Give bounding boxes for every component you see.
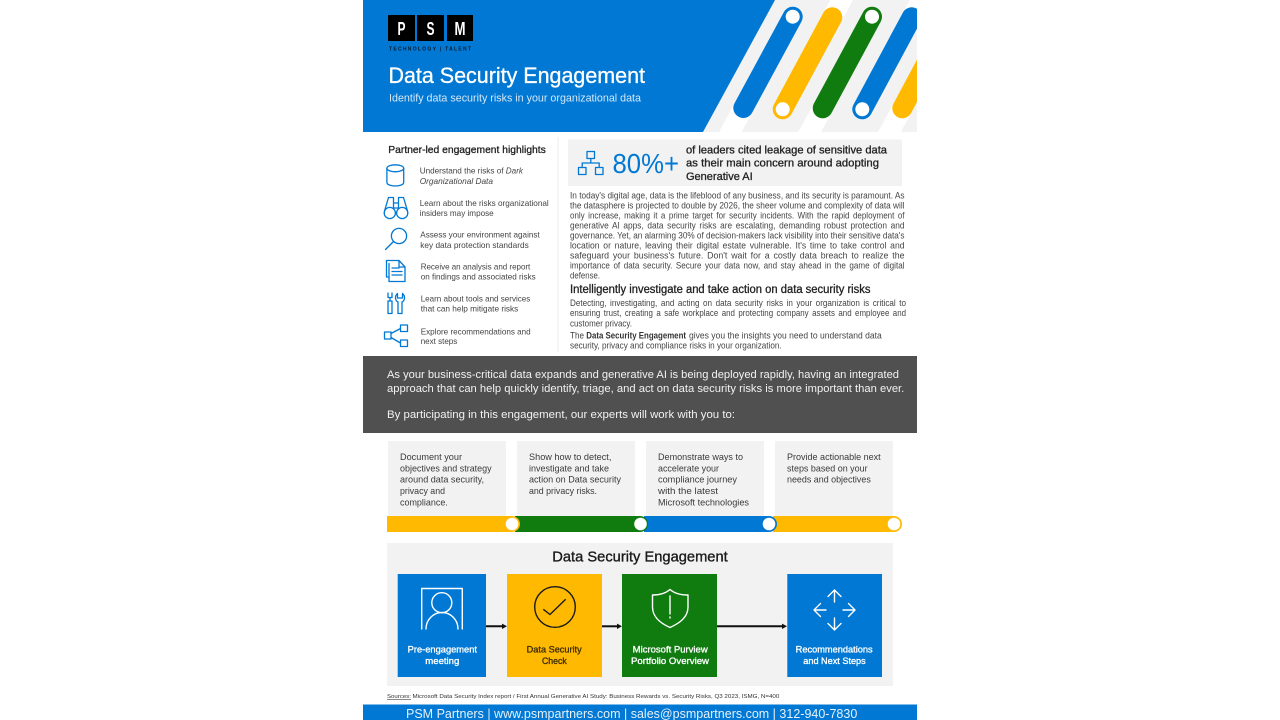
process heading: Data Security Engagement [552,550,728,566]
step: purview overview: Microsoft Purview [633,645,708,655]
stat description: of leaders cited leakage of sensitive data [686,144,888,156]
step: pre-engagement meeting: Pre-engagement [408,645,478,655]
subtitle: Identify data security risks in your organizational data [389,92,641,104]
dark call-to-action band: As your business-critical data expands and generative AI is being deployed rapidly, having an integrated [387,369,899,381]
icon: database [387,165,404,186]
arrow: step 2 to 3 [602,624,622,629]
step: recommendations: and Next Steps [803,656,866,666]
card: compliance journey [646,441,764,516]
icon: person [422,588,462,629]
panel: engagement process [387,543,893,686]
intro text block: safeguard your business's future. Don't wait for a costly data breach to realize the [570,251,905,261]
step: pre-engagement meeting: meeting [425,656,459,666]
card: detect and investigate [517,441,635,516]
section heading: Intelligently investigate and take action on data security risks [570,284,871,296]
icon: binoculars [384,198,408,219]
card: compliance journey: Microsoft technologies [658,496,749,507]
card: document objectives: compliance. [400,496,448,507]
highlight: next steps [384,325,531,346]
intro text block: only increase, making it a prime target for security incidents. With the rapid deployment of [570,210,905,220]
step: data security check [507,574,602,677]
highlight: report [386,260,536,282]
stat description: as their main concern around adopting [686,158,879,170]
stat number: 80%+ [612,148,679,179]
intro text block [570,190,905,281]
intro text block: the datasphere is projected to double by 2026, the sheer volume and complexity of data will [570,200,905,210]
highlight: dark data: Understand the risks of Dark [420,166,524,176]
intro text block: In today's digital age, data is the lifeblood of any business, and its security is paramount. As [570,190,905,200]
dark call-to-action band: By participating in this engagement, our experts will work with you to: [387,409,735,421]
icon: tools [388,293,405,314]
card: document objectives: around data security, [400,474,484,485]
icon: shield [652,590,688,628]
icon: org chart [578,152,603,174]
highlight: insiders: Learn about the risks organizational [420,198,549,208]
card: next steps: steps based on your [787,462,868,473]
sources note: Microsoft Data Security Index report / First Annual Generative AI Study: Business Rewards vs. Security Risks, Q3 2023, ISMG, N=400 [412,694,779,700]
highlight: standards: key data protection standards [420,240,529,250]
card: next steps: needs and objectives [787,474,871,485]
card: detect and investigate: and privacy risks. [529,485,597,496]
intro text block: location or nature, leaving their digital estate vulnerable. It's time to take control and [570,241,905,251]
step: data security check: Check [542,656,567,666]
investigate text block [570,298,906,350]
highlight: standards [386,228,540,250]
PSM logo: TECHNOLOGY | TALENT [389,46,471,52]
PSM logo [388,15,473,52]
intro text block: defense. [570,271,600,281]
icon: check circle [535,587,575,627]
investigate text block: customer privacy. [570,318,632,328]
highlight: next steps: next steps [421,336,457,346]
card: document objectives [388,441,506,516]
step: recommendations: Recommendations [796,645,873,655]
highlight: tools [388,293,530,314]
PSM logo: M [454,19,466,39]
card: next steps [775,441,893,516]
highlight: dark data: Organizational Data [420,176,493,186]
stat description: Generative AI [686,171,753,183]
icon: share nodes [384,325,408,346]
steps timeline [387,441,902,532]
investigate text block: Detecting, investigating, and acting on data security risks in your organization is critical to [570,298,906,308]
highlight: report: Receive an analysis and report [421,262,531,272]
card: document objectives: Document your [400,451,462,462]
step: recommendations [787,574,882,677]
PSM logo: P [398,19,406,39]
icon: magnifier [386,228,407,250]
investigate text block: security, privacy and compliance risks in your organization. [570,340,782,350]
sources note: Sources: [387,694,411,700]
intro text block: importance of data security. Secure your data now, and stay ahead in the game of digital [570,261,905,271]
timeline bar [387,516,902,532]
card: document objectives: objectives and strategy [400,462,492,473]
arrow: step 3 to 4 [717,624,787,629]
intro text block: governance. Yet, an alarming 30% of decision-makers lack visibility into their sensitive data's [570,230,905,240]
highlight: next steps: Explore recommendations and [421,326,531,336]
investigate text block: gives you the insights you need to understand data [689,331,882,341]
highlight: standards: Assess your environment against [420,230,540,240]
investigate text block: ensuring trust, creating a safe workplace and protecting company assets and employee and [570,308,906,318]
card: detect and investigate: action on Data security [529,474,621,485]
investigate text block: Data Security Engagement [586,331,686,341]
card: compliance journey: compliance journey [658,474,737,485]
card: detect and investigate: Show how to detect, [529,451,611,462]
card: compliance journey: Demonstrate ways to [658,451,743,462]
highlight: dark data [387,165,524,186]
highlight: tools: that can help mitigate risks [421,304,518,314]
investigate text block: The [570,331,584,341]
stat description [686,144,888,183]
step: pre-engagement meeting [398,574,486,677]
dark call-to-action band: approach that can help quickly identify, triage, and act on data security risks is more important than ever. [387,383,904,395]
card: compliance journey: with the latest [657,485,718,496]
icon: four arrows [814,590,855,630]
header banner [363,0,917,132]
card: document objectives: privacy and [400,485,445,496]
arrow: step 1 to 2 [486,624,507,629]
title: Data Security Engagement [388,63,645,88]
highlight: insiders [384,198,549,219]
highlight: report: on findings and associated risks [421,272,536,282]
PSM logo: S [426,19,434,39]
highlight: tools: Learn about tools and services [421,294,530,304]
step: purview overview [622,574,717,677]
icon: document [386,260,405,282]
stat callout: 80%+ [568,140,902,186]
step: purview overview: Portfolio Overview [631,656,710,666]
intro text block: generative AI apps, data security risks are escalating, demanding robust protection and [570,220,905,230]
card: compliance journey: accelerate your [658,462,719,473]
infographic page [363,0,917,720]
panel: engagement highlights [384,144,549,346]
highlights heading: Partner-led engagement highlights [388,144,546,156]
highlight: insiders: insiders may impose [420,208,494,218]
step: data security check: Data Security [527,645,582,655]
dark call-to-action band [363,356,917,433]
card: next steps: Provide actionable next [787,451,881,462]
card: detect and investigate: investigate and take [529,462,609,473]
